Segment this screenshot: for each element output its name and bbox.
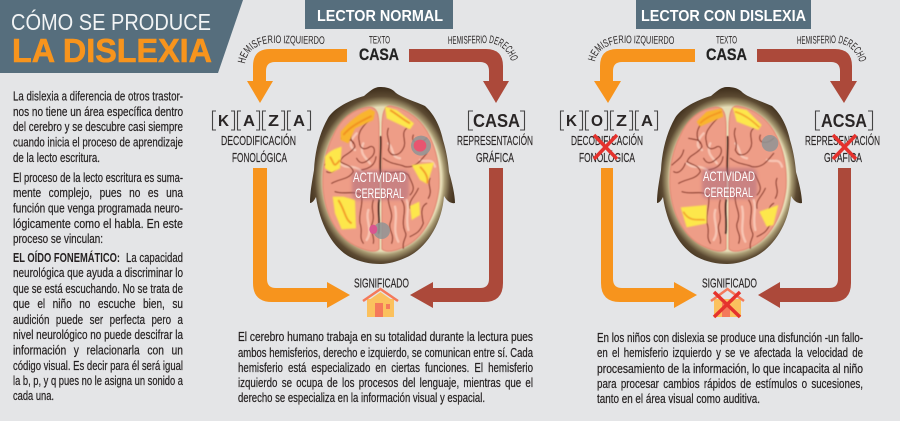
text label: texto casa: [359, 34, 399, 64]
text label: texto casa: TEXTO: [369, 34, 390, 46]
label: actividad cerebral: [352, 169, 409, 201]
title banner: [0, 0, 243, 73]
text block: introduction: de la lecto escritura.: [13, 150, 100, 165]
arrow: red bottom: [410, 168, 503, 308]
label: hemisferio derecho: HEMISFERIO DERECHO: [797, 35, 866, 62]
brain illustration: [657, 87, 802, 264]
text block: reading process: proceso se vinculan:: [13, 231, 103, 246]
letters: k a z a: K: [218, 113, 229, 130]
letters: k o z a: Z: [616, 113, 627, 130]
text block: phonemic ear: La capacidad: [126, 250, 183, 265]
arrow: red top: [757, 49, 857, 103]
arrow: orange bottom: [601, 168, 697, 308]
text block: introduction: del cerebro y se descubre casi siempre: [13, 119, 183, 134]
text block: phonemic ear: [13, 250, 184, 403]
text block: phonemic ear: nivel neurológico no puede descifrar la: [13, 327, 184, 342]
text block: phonemic ear: cada una.: [13, 388, 54, 403]
brain illustration: [310, 87, 455, 264]
letters: k a z a: A: [243, 113, 255, 130]
text block: phonemic ear: la b, p, y q pues no le asigna un sonido a: [13, 373, 184, 388]
arrow: red bottom: [758, 168, 851, 308]
label: actividad cerebral: [702, 168, 757, 200]
icon: crossed house: [711, 289, 744, 317]
letters: casa: CASA: [473, 111, 520, 131]
heading: lector con dislexia: LECTOR CON DISLEXIA: [641, 8, 806, 25]
panel: lector con dislexia: [560, 0, 880, 406]
letters: k o z a: A: [641, 113, 653, 130]
text block: normal reader explanation: hemisferio está especializado en ciertas funciones. El hemisferio: [238, 361, 533, 375]
icon: red cross decoding: [594, 135, 617, 159]
letters: k a z a: Z: [268, 113, 279, 130]
text block: phonemic ear: EL OÍDO FONEMÁTICO:: [13, 250, 120, 265]
label: representación gráfica: REPRESENTACIÓN: [457, 133, 533, 148]
label: representación gráfica: GRÁFICA: [824, 150, 862, 165]
label: decodificación fonológica: DECODIFICACIÓN: [571, 133, 643, 148]
letters: k o z a: [560, 111, 658, 130]
text block: phonemic ear: neurológica que ayuda a discriminar lo: [13, 265, 183, 280]
text block: phonemic ear: que se está escuchando. No se trata de: [13, 281, 183, 296]
text block: introduction: [13, 88, 183, 165]
text block: reading process: El proceso de la lecto escritura es suma-: [13, 170, 183, 185]
label: decodificación fonológica: [221, 133, 296, 165]
letters: acsa: ACSA: [821, 111, 867, 131]
title banner: CÓMO SE PRODUCE: [11, 9, 211, 35]
text block: reading process: lógicamente como el habla. En este: [13, 216, 183, 231]
text block: normal reader explanation: derecho se especializa en la información visual y espacial.: [238, 391, 485, 405]
label: hemisferio izquierdo: HEMISFERIO IZQUIERDO: [588, 36, 674, 62]
text block: phonemic ear: código visual. Es decir para él será igual: [13, 358, 183, 373]
text block: phonemic ear: audición puede ser perfecta pero a: [13, 312, 184, 327]
text block: introduction: La dislexia a diferencia de otros trastor-: [13, 88, 183, 104]
letters: k o z a: O: [591, 113, 603, 130]
label: hemisferio izquierdo: HEMISFERIO IZQUIERDO: [238, 35, 324, 64]
text label: texto casa: CASA: [706, 45, 747, 64]
arrow: red top: [409, 49, 509, 103]
letters: k o z a: K: [566, 113, 577, 130]
label: representación gráfica: GRÁFICA: [476, 150, 514, 165]
label: actividad cerebral: CEREBRAL: [355, 185, 404, 201]
label: representación gráfica: [457, 133, 533, 165]
arrow: orange top: [247, 49, 347, 103]
text label: texto casa: TEXTO: [716, 34, 737, 46]
label: hemisferio derecho: HEMISFERIO DERECHO: [448, 35, 518, 60]
panel: lector normal: [212, 0, 534, 405]
text block: introduction: nos no tiene un área específica dentro: [13, 104, 183, 119]
heading: lector con dislexia: [636, 0, 811, 29]
letters: k a z a: [212, 111, 310, 130]
label: decodificación fonológica: FONOLÓGICA: [232, 150, 287, 165]
text block: reading process: función que venga programada neuro-: [13, 200, 183, 216]
text block: phonemic ear: información y relacionarla con un: [13, 342, 183, 358]
label: representación gráfica: [805, 133, 880, 165]
label: decodificación fonológica: [571, 133, 643, 165]
text block: introduction: cuando inicia el proceso de aprendizaje: [13, 134, 183, 150]
icon: house: [363, 289, 398, 317]
text block: reading process: mente complejo, pues no es una: [13, 185, 184, 200]
arrow: orange top: [594, 49, 695, 103]
text label: texto casa: CASA: [359, 45, 399, 64]
label: decodificación fonológica: DECODIFICACIÓN: [221, 133, 296, 148]
title banner: LA DISLEXIA: [12, 32, 212, 69]
text block: normal reader explanation: izquierdo se ocupa de los procesos del lenguaje, mientras que el: [238, 376, 533, 390]
label: actividad cerebral: ACTIVIDAD: [703, 168, 755, 184]
heading: lector normal: LECTOR NORMAL: [317, 8, 443, 25]
text label: texto casa: [706, 34, 747, 64]
label: decodificación fonológica: FONOLÓGICA: [579, 150, 635, 165]
heading: lector normal: [305, 0, 453, 29]
icon: red cross representation: [833, 135, 856, 159]
label: actividad cerebral: ACTIVIDAD: [353, 169, 406, 185]
text block: normal reader explanation: ambos hemisferios, derecho e izquierdo, se comunican entre sí. Cada: [238, 346, 533, 360]
text block: normal reader explanation: [238, 330, 533, 405]
label: actividad cerebral: CEREBRAL: [704, 184, 753, 200]
label: significado: SIGNIFICADO: [354, 276, 409, 290]
text block: phonemic ear: que el niño no escuche bien, su: [13, 296, 183, 311]
letters: k a z a: A: [293, 113, 305, 130]
text block: dyslexic reader explanation: tanto en el área visual como auditiva.: [597, 392, 760, 406]
arrow: orange bottom: [253, 168, 350, 308]
text block: reading process: [13, 170, 184, 246]
label: significado: SIGNIFICADO: [702, 276, 757, 290]
text block: normal reader explanation: El cerebro humano trabaja en su totalidad durante la lectura pues: [238, 330, 533, 344]
text block: dyslexic reader explanation: [597, 331, 863, 406]
